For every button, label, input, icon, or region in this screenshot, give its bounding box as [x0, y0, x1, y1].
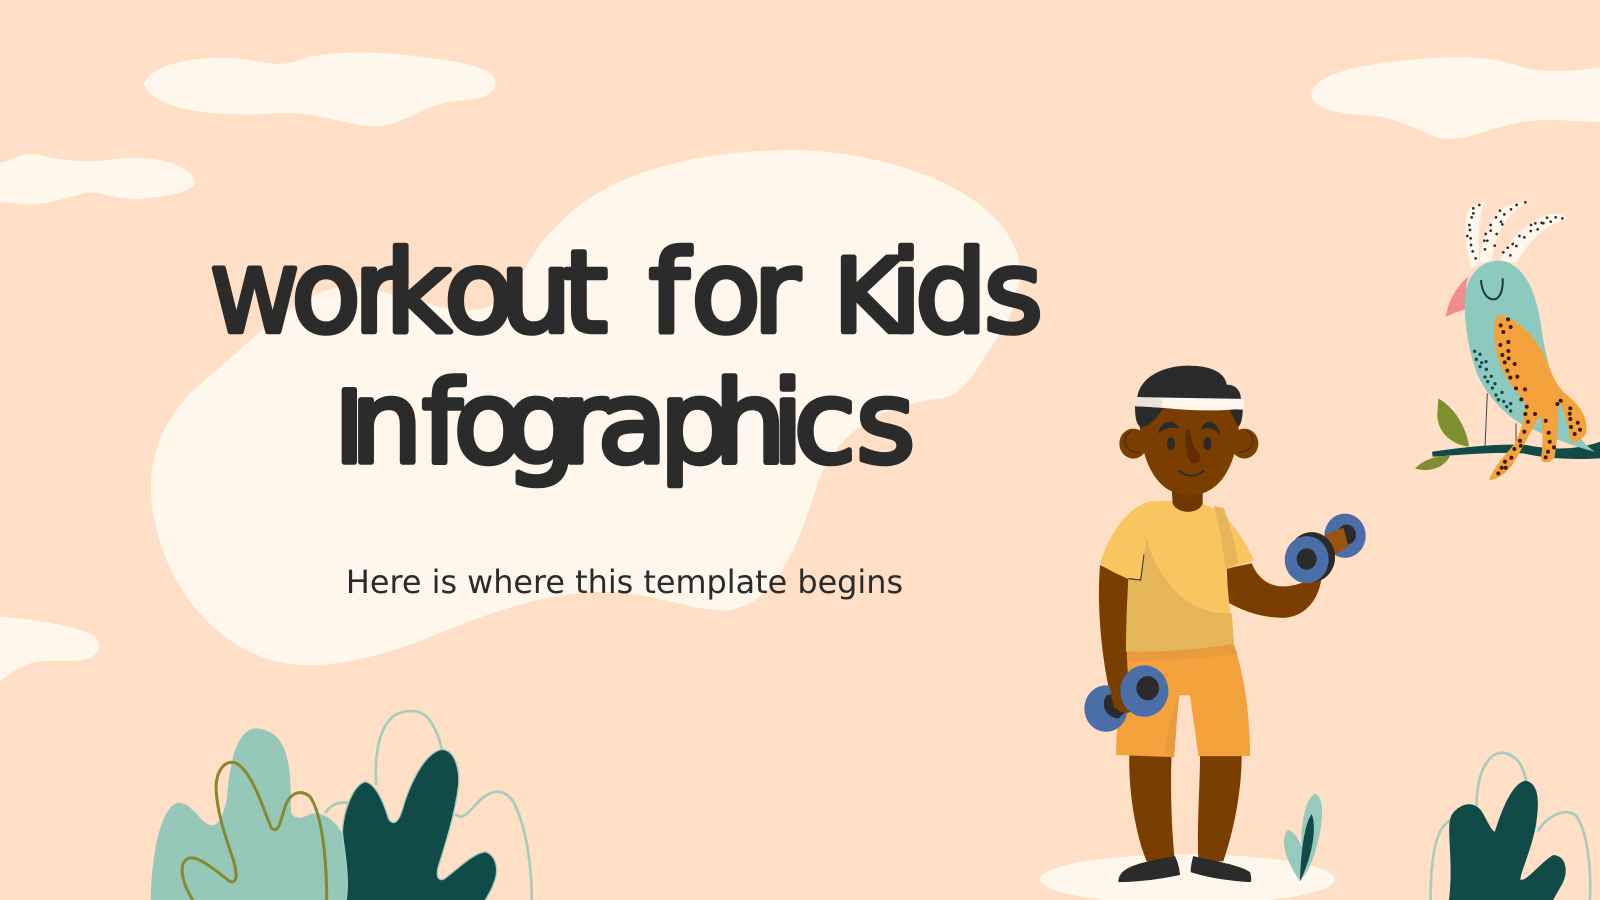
small sprout: [1284, 794, 1322, 881]
wing and tail: [1489, 315, 1586, 480]
arms: [1099, 563, 1322, 697]
cloud: lower left: [0, 616, 99, 682]
t-shirt: [1100, 501, 1254, 652]
leaves: [1415, 398, 1469, 470]
subtitle: Here is where this template begins: [346, 565, 903, 601]
ground ellipse: [1040, 854, 1335, 900]
body: [1465, 261, 1595, 452]
crest dots: [1466, 201, 1564, 260]
title: W: [212, 252, 297, 353]
illustration: plant bottom right: [1431, 753, 1590, 900]
illustration: boy lifting dumbbells: [1040, 366, 1366, 900]
body dots: [1473, 350, 1512, 413]
title: nfographics: [351, 357, 915, 489]
head: [1119, 366, 1258, 495]
beak: [1446, 277, 1468, 317]
title: I: [335, 371, 364, 486]
illustration: plants bottom left: [151, 711, 532, 900]
title: K: [834, 238, 904, 357]
title: ids: [890, 227, 1043, 359]
closed eye: [1481, 278, 1503, 299]
shorts: [1116, 644, 1250, 757]
dumbbell: right hand: [1285, 514, 1366, 583]
cloud: upper left: [0, 153, 195, 204]
title: [212, 227, 1043, 489]
crest: [1465, 201, 1568, 268]
illustration: parrot on branch: [1415, 201, 1600, 480]
title: orkout for: [291, 227, 842, 359]
cloud: top centre-left: [144, 53, 496, 127]
title backdrop blob: [151, 150, 1020, 665]
dumbbell: left hand: [1084, 665, 1168, 732]
cloud: top right: [1311, 57, 1600, 139]
legs and shoes: [1118, 754, 1251, 882]
wing dots: [1496, 317, 1582, 475]
legs: [1485, 393, 1516, 447]
branch: [1432, 442, 1600, 459]
neck: [1172, 486, 1203, 513]
